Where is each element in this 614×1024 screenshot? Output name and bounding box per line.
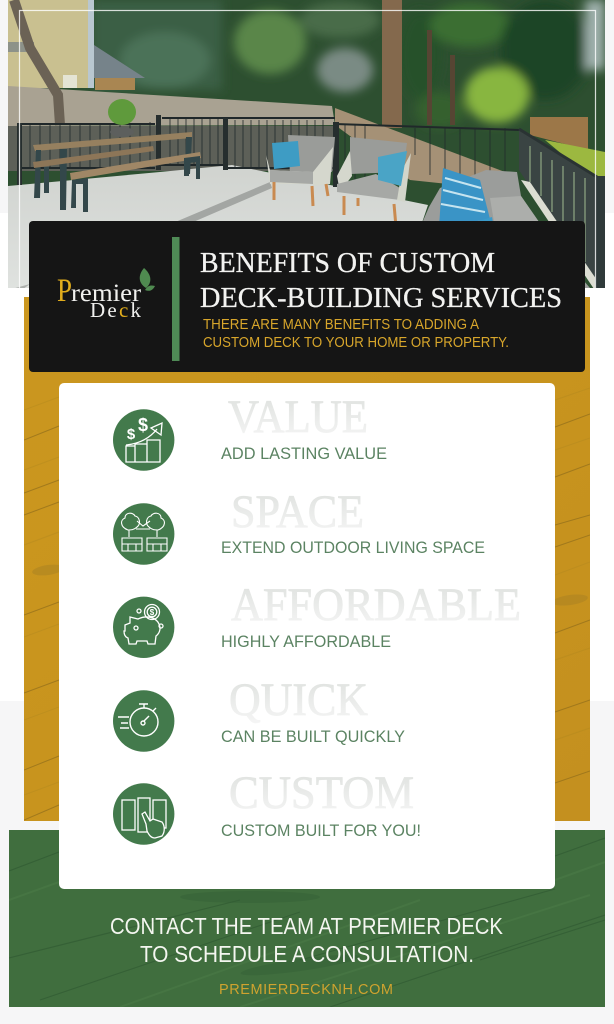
thin white frame — [18, 10, 596, 288]
table and benches — [33, 132, 192, 151]
icon: piggy bank with coin: $ — [150, 608, 155, 617]
call to action text: TO SCHEDULE A CONSULTATION. — [140, 941, 474, 967]
label: extend outdoor living space: EXTEND OUTDOOR LIVING SPACE — [221, 538, 485, 557]
label: can be built quickly: CAN BE BUILT QUICKLY — [221, 727, 405, 746]
faded word: quick: QUICK — [229, 674, 368, 726]
photo: deck with outdoor furniture — [8, 0, 605, 288]
icon: trees and outdoor chairs — [113, 503, 174, 565]
icon: green leaves — [140, 268, 155, 291]
icon: money growth chart — [113, 409, 174, 471]
faded word: affordable: AFFORDABLE — [231, 579, 521, 631]
logo: Premier Deck — [57, 268, 155, 322]
panel: white benefits card — [59, 383, 555, 889]
benefit row: affordable — [113, 579, 521, 658]
title — [200, 247, 562, 314]
icon: stopwatch — [113, 690, 174, 752]
faded word: value: VALUE — [228, 391, 368, 443]
green divider bar — [172, 237, 180, 361]
faded word: space: SPACE — [231, 486, 364, 538]
right side rail — [519, 131, 595, 277]
label: custom built for you: CUSTOM BUILT FOR YOU! — [221, 821, 421, 840]
call to action text — [110, 913, 504, 967]
railing — [22, 117, 519, 180]
panel: yellow wood background — [24, 297, 590, 821]
icon: money growth chart: $ — [138, 415, 148, 435]
sofa — [407, 170, 590, 288]
benefit row: quick — [113, 674, 405, 752]
planter — [108, 99, 136, 125]
panel: black header banner — [29, 221, 585, 372]
call to action text: CONTACT THE TEAM AT PREMIER DECK — [110, 913, 504, 939]
logo: Premier Deck: Deck — [90, 298, 142, 322]
dark band behind railing — [8, 126, 335, 171]
benefit row: value — [113, 391, 387, 471]
title: BENEFITS OF CUSTOM — [200, 247, 495, 279]
armchair left — [288, 135, 335, 175]
label: add lasting value: ADD LASTING VALUE — [221, 444, 387, 463]
tree canopy — [92, 0, 605, 128]
house siding — [8, 0, 89, 88]
icon: money growth chart: $ — [127, 426, 136, 443]
beige fence — [8, 86, 335, 126]
subtitle — [203, 316, 509, 351]
birch tree — [14, 0, 60, 125]
benefit row: custom — [113, 767, 421, 845]
subtitle: CUSTOM DECK TO YOUR HOME OR PROPERTY. — [203, 334, 509, 351]
label: highly affordable: HIGHLY AFFORDABLE — [221, 632, 391, 651]
faded word: custom: CUSTOM — [229, 767, 414, 819]
icon: hand selecting panels — [113, 783, 174, 845]
armchair right — [350, 137, 407, 174]
website url: PREMIERDECKNH.COM — [219, 982, 393, 998]
subtitle: THERE ARE MANY BENEFITS TO ADDING A — [203, 316, 479, 333]
panel: green wood footer background — [9, 830, 605, 1007]
logo: Premier Deck: remier — [71, 280, 142, 307]
benefit row: space — [113, 486, 485, 565]
logo: Premier Deck: P — [57, 273, 72, 309]
deck floor — [8, 165, 428, 288]
icon: piggy bank with coin — [113, 597, 174, 658]
title: DECK-BUILDING SERVICES — [200, 282, 562, 314]
